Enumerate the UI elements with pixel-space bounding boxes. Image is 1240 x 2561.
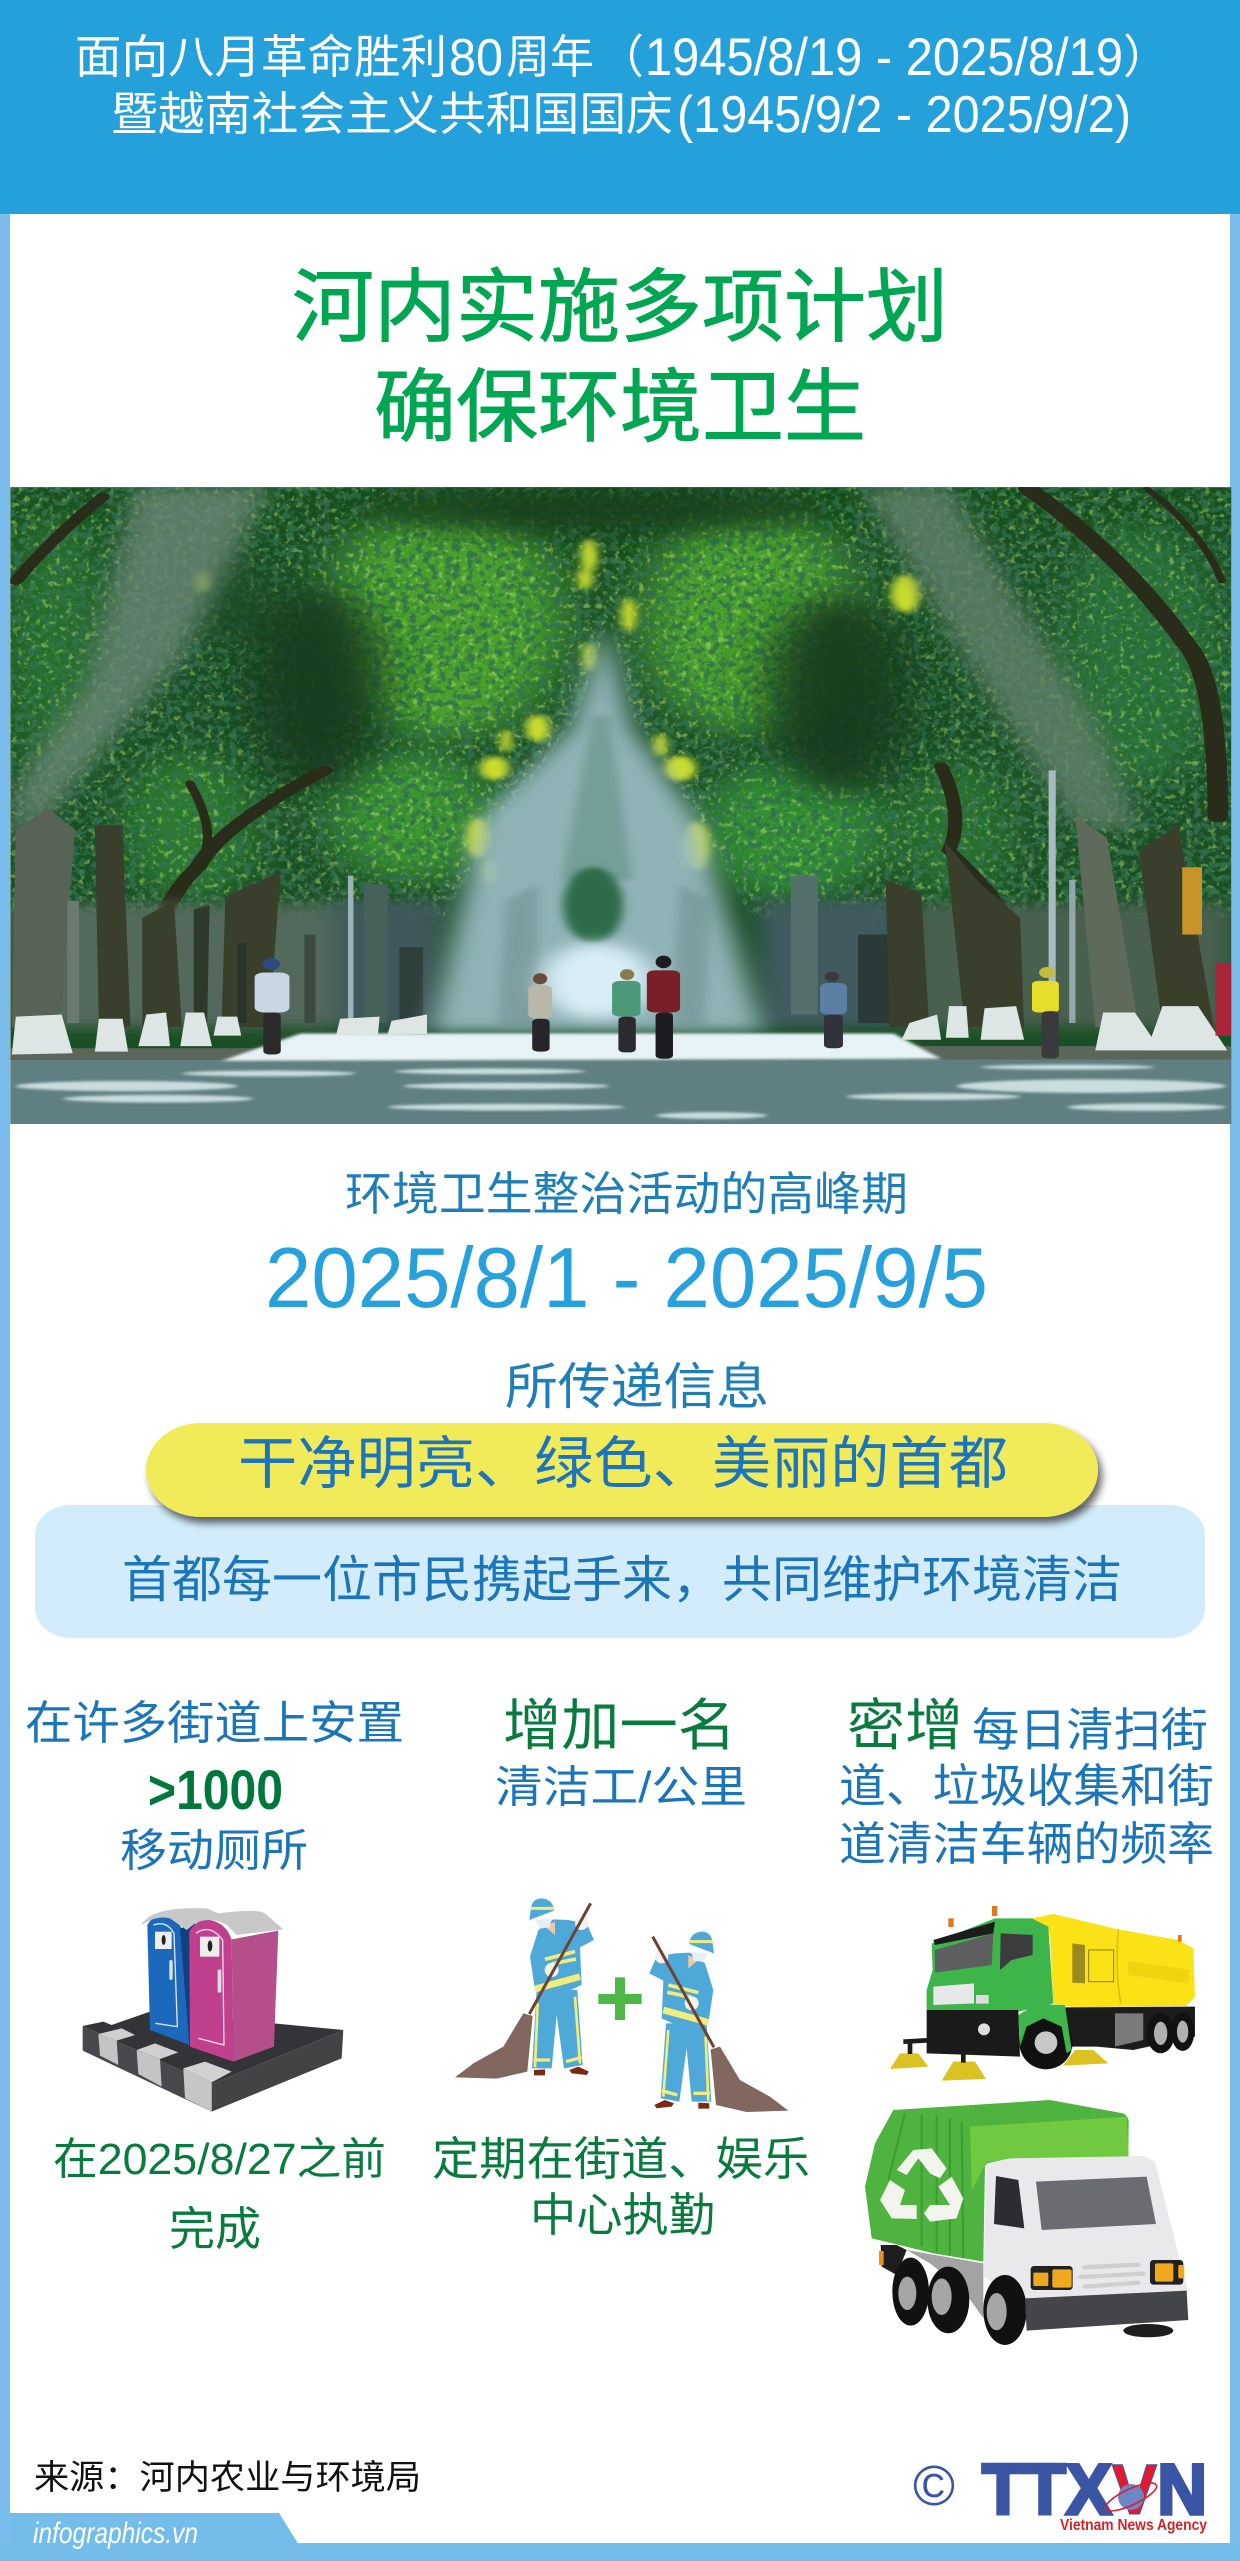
toilets unit: 移动厕所 <box>120 1825 308 1876</box>
header line 1: ） <box>1123 31 1169 83</box>
icon: recycling garbage truck <box>865 2100 1188 2345</box>
column 3: cleaning frequency <box>839 1694 1214 2345</box>
recycling symbol <box>880 2148 963 2222</box>
message panel text: 首都每一位市民携起手来，共同维护环境清洁 <box>122 1552 1122 1608</box>
toilets deadline: 在2025/8/27之前 <box>53 2135 386 2184</box>
header line 2: (1945/9/2 - 2025/9/2) <box>677 86 1131 144</box>
message label: 所传递信息 <box>505 1359 769 1415</box>
frequency text line 2: 道、垃圾收集和街 <box>839 1760 1214 1812</box>
cleaners unit: 清洁工/公里 <box>495 1763 747 1812</box>
frequency keyword: 密增 <box>847 1694 963 1757</box>
cleaners heading: 增加一名 <box>503 1694 736 1757</box>
white painted trunk bases <box>12 1006 1227 1055</box>
plus sign <box>598 1977 642 2020</box>
toilets heading: 在许多街道上安置 <box>25 1697 404 1749</box>
yellow slogan pill <box>146 1423 1098 1517</box>
title: 河内实施多项计划 <box>292 263 948 352</box>
icon: portable toilets on platform <box>83 1908 343 2112</box>
campaign dates: 2025/8/1 - 2025/9/5 <box>265 1231 988 1326</box>
header line 1: 1945/8/19 - 2025/8/19 <box>645 28 1123 87</box>
logo: TTXVN Vietnam News Agency: TTXVN <box>982 2451 1207 2530</box>
website tab <box>10 2513 299 2550</box>
leaf texture <box>10 487 1231 918</box>
header band <box>0 0 1240 214</box>
campaign period label: 环境卫生整治活动的高峰期 <box>345 1168 908 1220</box>
header line 1: 周年 <box>506 31 594 83</box>
bottom bar <box>0 2543 1240 2561</box>
header line 1: （ <box>598 31 644 83</box>
cleaners duty line 1: 定期在街道、娱乐 <box>432 2133 810 2185</box>
icon: green and yellow street sweeper truck <box>890 1906 1195 2081</box>
title <box>292 263 948 452</box>
lower forest <box>10 901 1231 1027</box>
header line 2: 暨越南社会主义共和国国庆 <box>111 88 673 140</box>
logo tagline: Vietnam News Agency <box>1060 2517 1207 2534</box>
frequency text line 3: 道清洁车辆的频率 <box>839 1818 1214 1870</box>
copyright symbol: © <box>913 2454 955 2518</box>
light blue message panel <box>35 1505 1205 1638</box>
number over 1000: >1000 <box>148 1758 283 1821</box>
column 1: portable toilets <box>25 1697 404 2255</box>
header line 1: 面向八月革命胜利 <box>75 31 447 83</box>
branches <box>10 487 1228 910</box>
dark foliage masses <box>198 486 909 796</box>
header line 2 <box>111 86 1131 144</box>
cleaners duty line 2: 中心执勤 <box>530 2189 715 2241</box>
sunlit yellow leaves <box>195 539 920 885</box>
logo globe <box>1102 2478 1160 2516</box>
column 2: cleaners <box>432 1694 810 2241</box>
hazy sunlit trunks <box>16 487 1139 850</box>
source: 来源：河内农业与环境局 <box>34 2459 421 2497</box>
light shafts <box>431 623 763 1031</box>
frequency text line 1: 每日清扫街 <box>972 1704 1208 1756</box>
icon: two street sweepers with plus sign <box>455 1898 788 2112</box>
road <box>10 1033 1231 1124</box>
riders <box>255 956 1231 1059</box>
title: 确保环境卫生 <box>374 363 866 452</box>
toilets deadline second line: 完成 <box>169 2203 261 2255</box>
slogan text: 干净明亮、绿色、美丽的首都 <box>238 1432 1008 1496</box>
header line 1 <box>75 28 1169 87</box>
header line 1: 80 <box>449 29 503 87</box>
tree trunks <box>12 770 1214 1027</box>
photo: tree-lined street with motorbikes <box>8 484 1231 1124</box>
website text: infographics.vn <box>33 2517 198 2550</box>
